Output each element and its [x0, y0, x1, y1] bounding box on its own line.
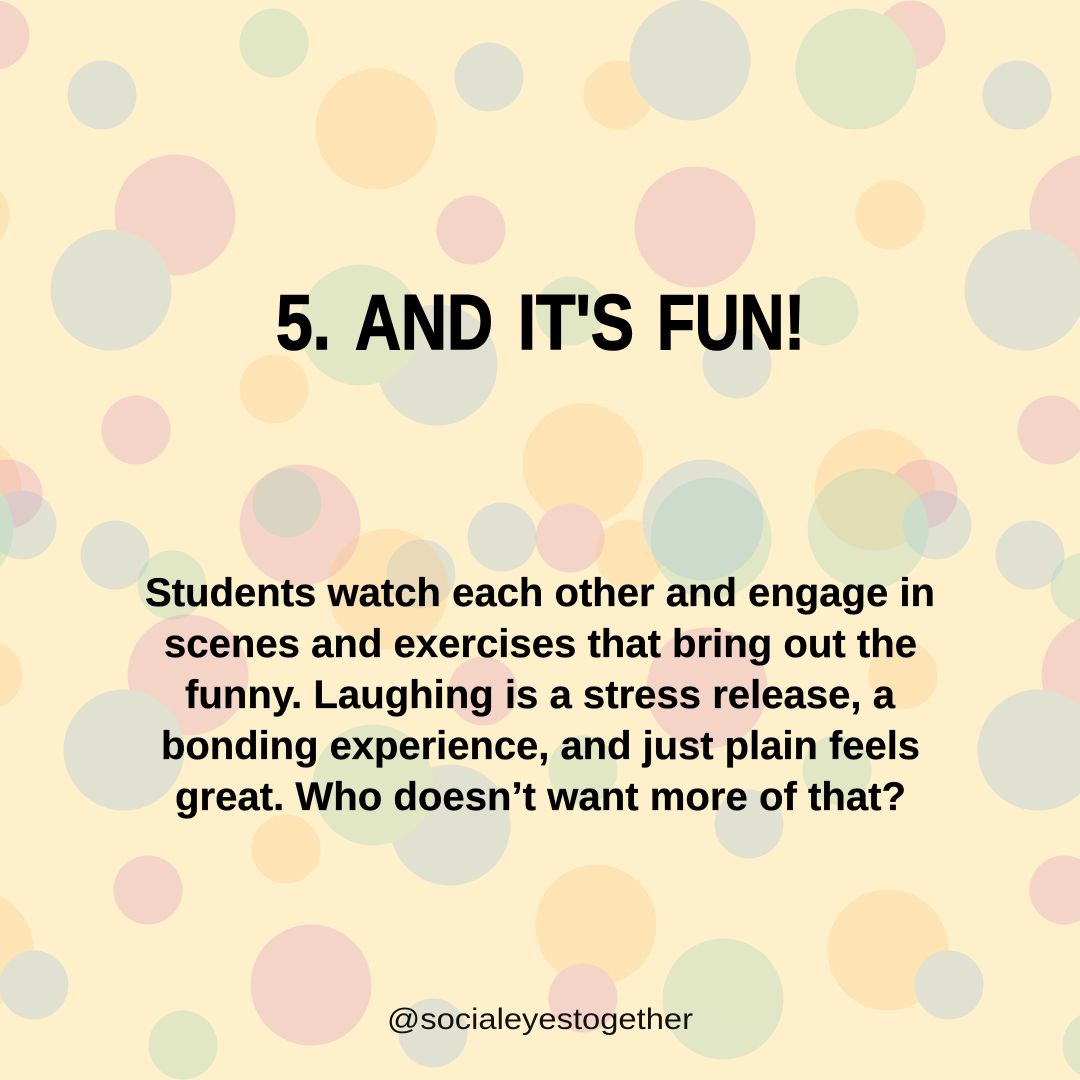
title [276, 278, 805, 366]
title: AND [355, 278, 493, 366]
body text [145, 571, 935, 819]
polka dot background pattern: upper layer [0, 0, 1080, 622]
body text: Students watch each other and engage in [145, 571, 935, 615]
body text: funny. Laughing is a stress release, a [185, 673, 896, 717]
title: 5. [276, 278, 331, 366]
body text: great. Who doesn’t want more of that? [175, 775, 906, 819]
polka dot background pattern: lower layer [0, 460, 1080, 1080]
title: IT'S [518, 278, 634, 366]
title: FUN! [657, 278, 805, 366]
body text: bonding experience, and just plain feels [161, 724, 920, 768]
social handle: @socialeyestogether [387, 1003, 693, 1036]
body text: scenes and exercises that bring out the [164, 622, 917, 666]
